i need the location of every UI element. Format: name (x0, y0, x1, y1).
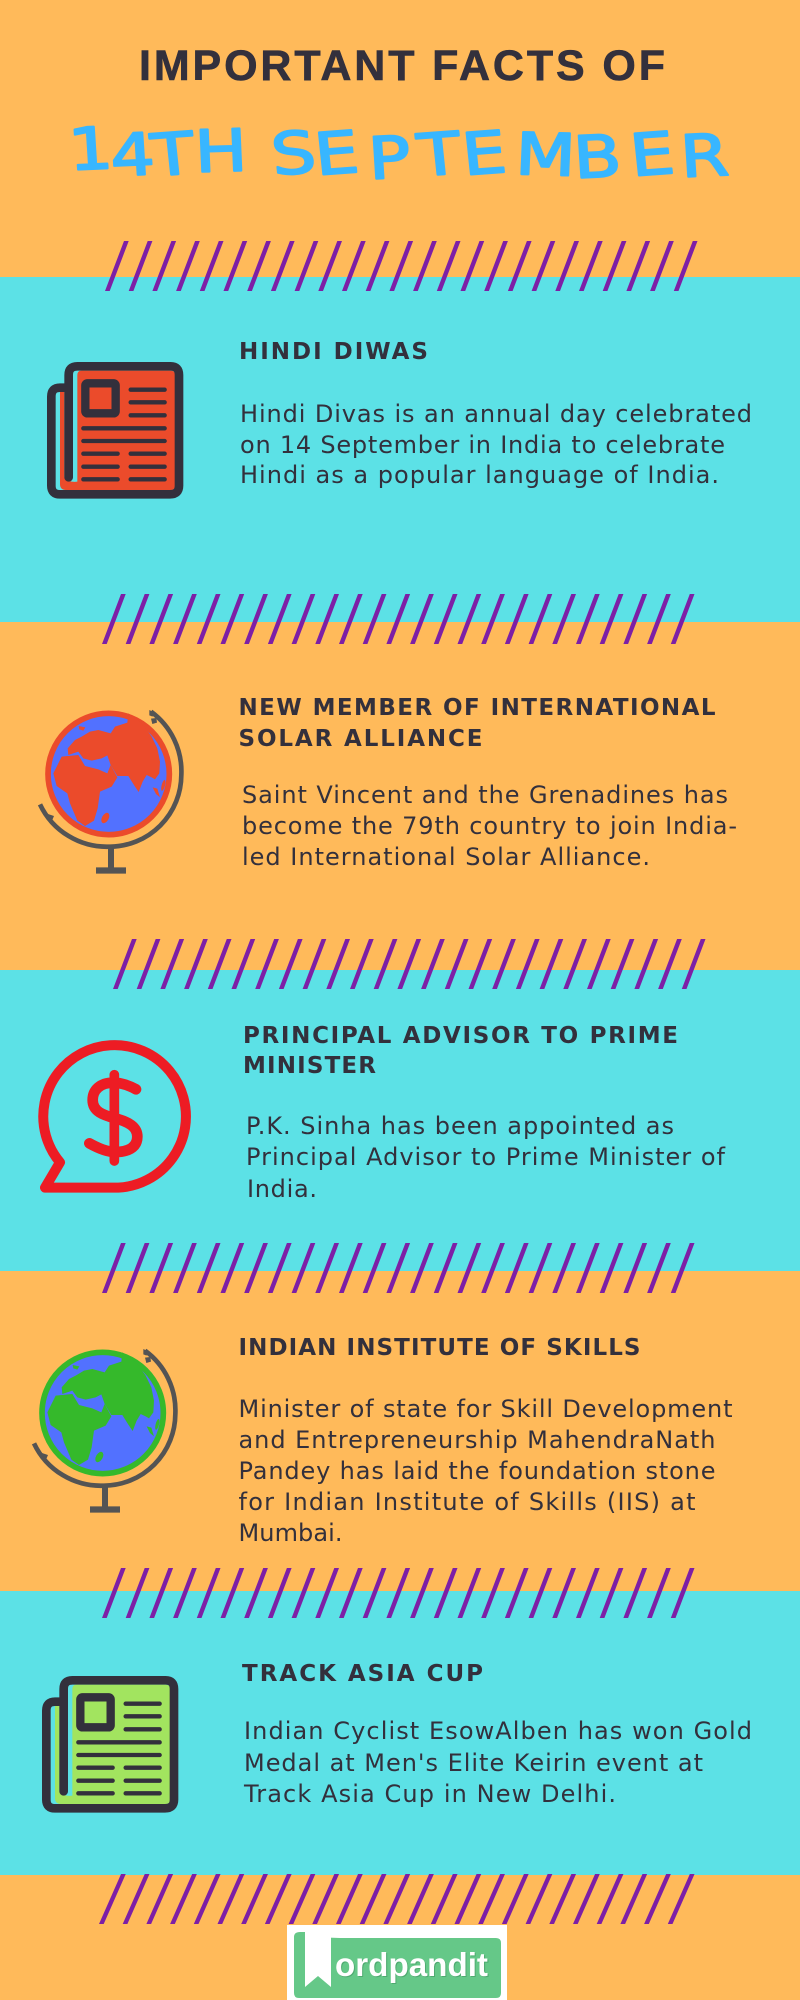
icon: red newspaper (51, 366, 179, 494)
text block: Hindi Diwas (240, 400, 752, 489)
icon: globe red (40, 710, 181, 874)
text block: Principal Advisor (246, 1112, 726, 1203)
divider hatch 1 (105, 241, 698, 291)
heading: Indian Institute of Skills: INDIAN INSTITUTE OF SKILLS (238, 1335, 640, 1361)
text block: Solar Alliance: led International Solar Alliance. (242, 843, 650, 871)
heading: Principal Advisor to Prime Minister (243, 1023, 678, 1079)
heading: Track Asia Cup: TRACK ASIA CUP (242, 1661, 483, 1687)
text block: Indian Institute of Skills (238, 1395, 732, 1547)
icon: globe green (34, 1349, 175, 1513)
text block: Indian Institute of Skills: Pandey has laid the foundation stone (238, 1457, 716, 1485)
panel content: Principal Advisor (43, 1023, 726, 1203)
divider hatch 5 (102, 1568, 695, 1618)
icon: dollar speech bubble (43, 1045, 186, 1188)
panel: footer background (0, 1875, 800, 2000)
title: IMPORTANT FACTS OF (139, 42, 665, 90)
heading: Principal Advisor to Prime Minister: MINISTER (243, 1053, 376, 1079)
text block: Indian Institute of Skills: and Entrepreneurship MahendraNath (238, 1426, 716, 1454)
panel content: Solar Alliance (40, 695, 737, 874)
text block: Track Asia Cup: Track Asia Cup in New Delhi. (243, 1780, 616, 1808)
panel: Track Asia Cup background (0, 1591, 800, 1875)
heading: Hindi Diwas: HINDI DIWAS (239, 339, 428, 365)
text block: Track Asia Cup: Medal at Men's Elite Keirin event at (244, 1749, 703, 1777)
logo: Wordpandit: ordpandit (335, 1946, 488, 1983)
panel content: Indian Institute of Skills (34, 1335, 732, 1547)
panel: Principal Advisor background (0, 970, 800, 1271)
text block: Track Asia Cup: Indian Cyclist EsowAlben has won Gold (244, 1717, 752, 1745)
text block: Hindi Diwas: Hindi Divas is an annual day celebrated (240, 400, 752, 428)
divider hatch 3 (113, 939, 706, 989)
panel: Solar Alliance background (0, 622, 800, 970)
text block: Track Asia Cup (243, 1717, 752, 1808)
panel: Hindi Diwas background (0, 277, 800, 622)
panel: Indian Institute of Skills background (0, 1271, 800, 1591)
subtitle: 14th September: 14TH SEPTEMBER (66, 116, 731, 193)
divider hatch 6 (99, 1874, 695, 1924)
divider hatch 2 (102, 594, 695, 644)
heading: New Member of International Solar Alliance (238, 695, 716, 752)
divider hatch 4 (102, 1243, 695, 1293)
text block: Solar Alliance: Saint Vincent and the Grenadines has (242, 781, 728, 809)
text block: Principal Advisor: India. (247, 1175, 317, 1203)
text block: Indian Institute of Skills: Minister of state for Skill Development (238, 1395, 732, 1423)
text block: Indian Institute of Skills: for Indian Institute of Skills (IIS) at (238, 1488, 696, 1516)
panel: header background (0, 0, 800, 277)
logo: Wordpandit (287, 1925, 507, 2000)
text block: Principal Advisor: P.K. Sinha has been appointed as (246, 1112, 674, 1140)
text block: Indian Institute of Skills: Mumbai. (238, 1519, 342, 1547)
text block: Solar Alliance (242, 781, 737, 871)
text block: Solar Alliance: become the 79th country to join India- (242, 812, 737, 840)
heading: New Member of International Solar Alliance: SOLAR ALLIANCE (238, 726, 482, 752)
panel content: Hindi Diwas (51, 339, 752, 494)
text block: Hindi Diwas: Hindi as a popular language of India. (240, 461, 719, 489)
heading: Principal Advisor to Prime Minister: PRINCIPAL ADVISOR TO PRIME (243, 1023, 678, 1049)
text block: Hindi Diwas: on 14 September in India to celebrate (240, 431, 725, 459)
panel content: Track Asia Cup (46, 1661, 752, 1808)
text block: Principal Advisor: Principal Advisor to Prime Minister of (246, 1143, 726, 1171)
heading: New Member of International Solar Alliance: NEW MEMBER OF INTERNATIONAL (238, 695, 716, 721)
icon: green newspaper (46, 1680, 174, 1808)
